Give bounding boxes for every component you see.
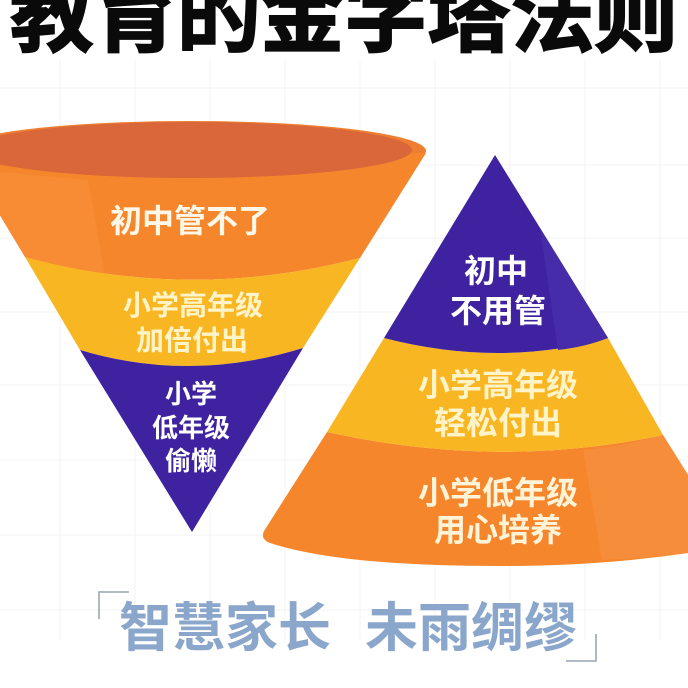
- funnel rim: [0, 121, 426, 181]
- pyramid band: yellow: [327, 338, 663, 452]
- pyramid label: top: 不用管: [450, 293, 546, 329]
- slogan text: 未雨绸缪: [365, 599, 577, 658]
- upright pyramid: [263, 155, 688, 566]
- pyramid base highlight: [583, 435, 688, 560]
- slogan brackets: [99, 592, 596, 661]
- funnel label: middle: 小学高年级: [123, 290, 263, 321]
- funnel opening ellipse: [0, 122, 412, 178]
- inverted pyramid funnel: [0, 121, 426, 532]
- pyramid label: middle: 轻松付出: [434, 405, 562, 441]
- funnel label: tip: [152, 379, 230, 476]
- funnel highlight: [0, 172, 106, 280]
- funnel label: tip: 低年级: [152, 413, 230, 443]
- slogan: [99, 592, 596, 661]
- pyramid purple highlight: [540, 228, 608, 350]
- pyramid label: bottom: [418, 475, 578, 548]
- pyramid label: middle: [418, 367, 578, 441]
- pyramid label: top: 初中: [464, 253, 528, 289]
- pyramid band: orange base: [263, 432, 688, 566]
- pyramid label: bottom: 用心培养: [434, 512, 562, 548]
- slogan text: 智慧家长: [119, 599, 331, 658]
- funnel label: tip: 偷懒: [165, 446, 217, 476]
- pyramid label: bottom: 小学低年级: [418, 475, 578, 511]
- pyramid label: top: [450, 253, 546, 329]
- funnel label: tip: 小学: [165, 379, 217, 409]
- funnel band: purple tip: [80, 348, 303, 532]
- funnel label: middle: 加倍付出: [136, 325, 248, 356]
- funnel band: yellow: [25, 257, 360, 366]
- funnel band: top orange: [0, 150, 426, 280]
- pyramid band: purple top: [384, 155, 608, 353]
- pyramid label: middle: 小学高年级: [418, 367, 578, 403]
- funnel label: middle: [123, 290, 263, 356]
- funnel label: top: 初中管不了: [110, 203, 270, 239]
